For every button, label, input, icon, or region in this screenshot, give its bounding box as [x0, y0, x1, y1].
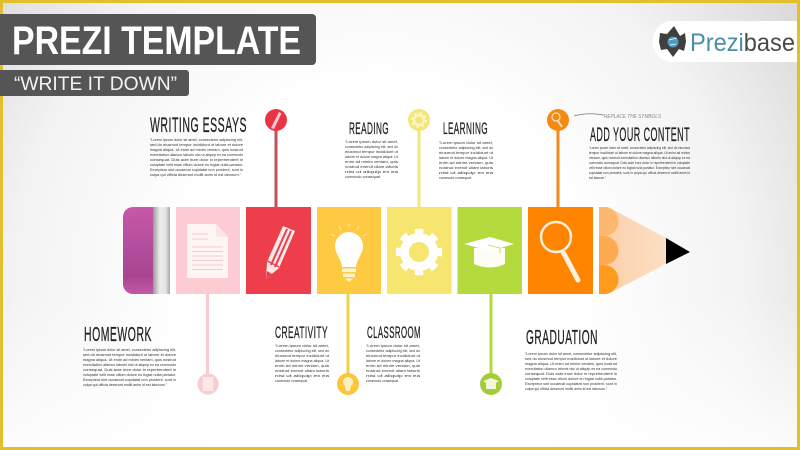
text block: creativity: CREATIVITY — [275, 323, 328, 342]
text block: learning: nostrud exercit ullam laboris — [439, 165, 493, 170]
text block: learning: labore et dolore magna aliqua. Ut — [439, 155, 494, 160]
text block: reading: labore et dolore magna aliqua. Ut — [345, 154, 399, 159]
text block: writing essays: “Lorem ipsum dolor sit amet, consectetur adipiscing elit, — [150, 137, 243, 142]
icon: pencil — [266, 226, 295, 279]
connector: reading (yellow) — [408, 109, 430, 207]
text block: learning: “Lorem ipsum dolor sit amet, — [439, 140, 493, 145]
text block: add your content: tempor incididunt ut labore et dolore magna aliqua. Ut enim ad minim — [589, 150, 691, 155]
text block: graduation: GRADUATION — [526, 327, 598, 349]
text block: add your content: cupidatat non proident, sunt in culpa qui officia deserunt mollit anim id — [589, 170, 690, 175]
icon: small cap — [483, 378, 499, 389]
icon: small magnifier — [552, 113, 562, 127]
text block: reading — [345, 120, 399, 179]
segment: pencil — [246, 207, 311, 294]
connector: learning (green) — [480, 294, 502, 395]
text block: classroom: consectetur adipiscing elit, sed do — [366, 348, 421, 353]
text block: learning: enim ad minim veniam, quis — [439, 160, 493, 165]
text block: classroom — [366, 323, 421, 383]
text block: homework — [83, 324, 177, 387]
segment: gear — [387, 207, 452, 294]
text block: graduation: sed do eiusmod tempor incididunt ut labore et dolore — [525, 356, 618, 361]
text block: graduation: “Lorem ipsum dolor sit amet, consectetur adipiscing elit, — [525, 351, 617, 356]
text block: add your content: commodo consequat. Duis aute irure dolor in reprehenderit in voluptate — [589, 160, 691, 165]
text block: learning: eiusmod tempor incididunt ut — [439, 150, 494, 155]
pencil graphic — [123, 207, 690, 294]
segment: magnifier — [528, 207, 593, 294]
text block: reading: “Lorem ipsum dolor sit amet, — [345, 139, 398, 144]
text block: classroom: eiusmod tempor incididunt ut — [366, 353, 421, 358]
text block: creativity: nostrud exercit ullam laboris — [275, 368, 329, 373]
text block: learning — [439, 120, 494, 180]
text block: learning: LEARNING — [443, 120, 488, 138]
text block: homework: sed do eiusmod tempor incididunt ut labore et dolore — [83, 352, 177, 357]
connector: add your content (orange) — [547, 109, 569, 207]
icon: Prezibase star — [659, 26, 686, 57]
connector: creativity (amber) — [337, 294, 359, 395]
text block: reading: commodo consequat. — [345, 174, 381, 179]
title: PREZI TEMPLATE — [12, 19, 301, 63]
icon: light bulb — [331, 224, 367, 282]
text block: graduation: magna aliqua. Ut enim ad minim veniam, quis nostrud — [525, 361, 617, 366]
text: CLASSROOM — [367, 323, 421, 342]
text block: writing essays — [150, 114, 247, 177]
text block: creativity: eiusmod tempor incididunt ut — [275, 353, 330, 358]
icon: gear — [399, 232, 439, 272]
pencil tip — [599, 207, 690, 294]
text block: add your content: velit esse cillum dolore eu fugiat nulla pariatur. Excepteur sint occaecat — [589, 165, 691, 170]
text block: classroom: enim ad minim veniam, quis — [366, 363, 420, 368]
icon: small pencil — [271, 112, 282, 129]
text block: writing essays: sed do eiusmod tempor incididunt ut labore et dolore — [150, 142, 244, 147]
text block: classroom: nostrud exercit ullam laboris — [366, 368, 420, 373]
icon: small bulb — [343, 377, 353, 391]
text block: classroom: commodo consequat. — [366, 378, 399, 383]
annotation: replace the symbols: REPLACE THE SYMBOLS — [604, 114, 662, 120]
text block: classroom: “Lorem ipsum dolor sit amet, — [366, 343, 420, 348]
text block: reading: nostrud exercit ullam laboris — [345, 164, 398, 169]
text block: writing essays: Excepteur sint occaecat cupidatat non proident, sunt in — [150, 167, 243, 172]
segment: light bulb — [317, 207, 381, 294]
text block: writing essays: consequat. Duis aute irure dolor in reprehenderit in — [150, 157, 243, 162]
scalloped edge — [599, 207, 618, 294]
text block: reading: enim ad minim veniam, quis — [345, 159, 398, 164]
text block: add your content: “Lorem ipsum dolor sit amet, consectetur adipiscing elit, sed do eiusmod — [589, 145, 690, 150]
icon: graduation cap — [464, 237, 514, 268]
text block: homework: consequat. Duis aute irure dolor in reprehenderit in — [83, 367, 176, 372]
text block: learning: commodo consequat. — [439, 175, 472, 180]
text block: homework: voluptate velit esse cillum dolore eu fugiat nulla pariatur. — [83, 372, 176, 377]
eraser — [123, 207, 154, 294]
text block: classroom: labore et dolore magna aliqua. Ut — [366, 358, 421, 363]
text block: homework: culpa qui officia deserunt mollit anim id est laborum.” — [83, 382, 168, 387]
text block: creativity — [275, 323, 330, 383]
text block: creativity: nisi ut aliquip ex ea — [275, 373, 330, 378]
text block: writing essays: culpa qui officia deserunt mollit anim id est laborum.” — [150, 172, 242, 177]
logo wordmark: Prezibase — [690, 29, 795, 57]
text block: graduation: voluptate velit esse cillum dolore eu fugiat nulla pariatur. — [525, 376, 617, 381]
text block: graduation — [525, 327, 618, 391]
text block: learning: consectetur adipiscing elit, sed do — [439, 145, 494, 150]
text block: add your content: est laborum.” — [589, 175, 606, 180]
text block: writing essays: exercitation ullamco laboris nisi ut aliquip ex ea commodo — [150, 152, 244, 157]
icon: small gear — [412, 113, 426, 127]
icon: small document — [202, 377, 214, 391]
segment: document — [176, 207, 240, 294]
text block: writing essays: voluptate velit esse cillum dolore eu fugiat nulla pariatur. — [150, 162, 243, 167]
text block: graduation: consequat. Duis aute irure dolor in reprehenderit in — [525, 371, 617, 376]
connector: writing essays (red) — [265, 109, 287, 207]
text block: reading: READING — [349, 120, 389, 138]
logo: Prezibase — [653, 21, 797, 62]
text block: reading: nisi ut aliquip ex ea — [345, 169, 399, 174]
text block: writing essays: WRITING ESSAYS — [150, 114, 247, 137]
annotation: replace the symbols — [574, 114, 662, 120]
text block: graduation: exercitation ullamco laboris nisi ut aliquip ex ea commodo — [525, 366, 618, 371]
text block: writing essays: magna aliqua. Ut enim ad minim veniam, quis nostrud — [150, 147, 243, 152]
text block: homework: “Lorem ipsum dolor sit amet, consectetur adipiscing elit, — [83, 347, 176, 352]
text block: creativity: enim ad minim veniam, quis — [275, 363, 329, 368]
wood cone — [603, 207, 666, 294]
text block: reading: consectetur adipiscing elit, sed do — [345, 144, 399, 149]
text block: creativity: commodo consequat. — [275, 378, 308, 383]
metal ferrule — [153, 207, 170, 294]
text block: homework: magna aliqua. Ut enim ad minim veniam, quis nostrud — [83, 357, 176, 362]
text block: graduation: Excepteur sint occaecat cupidatat non proident, sunt in — [525, 381, 617, 386]
text block: creativity: consectetur adipiscing elit, sed do — [275, 348, 330, 353]
text block: homework: exercitation ullamco laboris nisi ut aliquip ex ea commodo — [83, 362, 177, 367]
text block: homework: Excepteur sint occaecat cupidatat non proident, sunt in — [83, 377, 176, 382]
icon: magnifier — [541, 222, 578, 280]
segment: graduation cap — [458, 207, 522, 294]
text block: homework: HOMEWORK — [84, 324, 152, 346]
text block: creativity: “Lorem ipsum dolor sit amet, — [275, 343, 329, 348]
text block: graduation: culpa qui officia deserunt mollit anim id est laborum.” — [525, 386, 608, 391]
text block: reading: eiusmod tempor incididunt ut — [345, 149, 399, 154]
icon: document — [187, 224, 228, 278]
lead — [666, 238, 690, 264]
text block: classroom: nisi ut aliquip ex ea — [366, 373, 421, 378]
text block: add your content: veniam, quis nostrud exercitation ullamco laboris nisi ut aliquip ex ea — [589, 155, 691, 160]
text block: learning: nisi ut aliquip ex ea — [439, 170, 494, 175]
connector: homework (pink) — [198, 294, 218, 394]
text block: add your content — [589, 124, 691, 180]
text block: creativity: labore et dolore magna aliqua. Ut — [275, 358, 330, 363]
subtitle: “WRITE IT DOWN” — [14, 73, 177, 95]
